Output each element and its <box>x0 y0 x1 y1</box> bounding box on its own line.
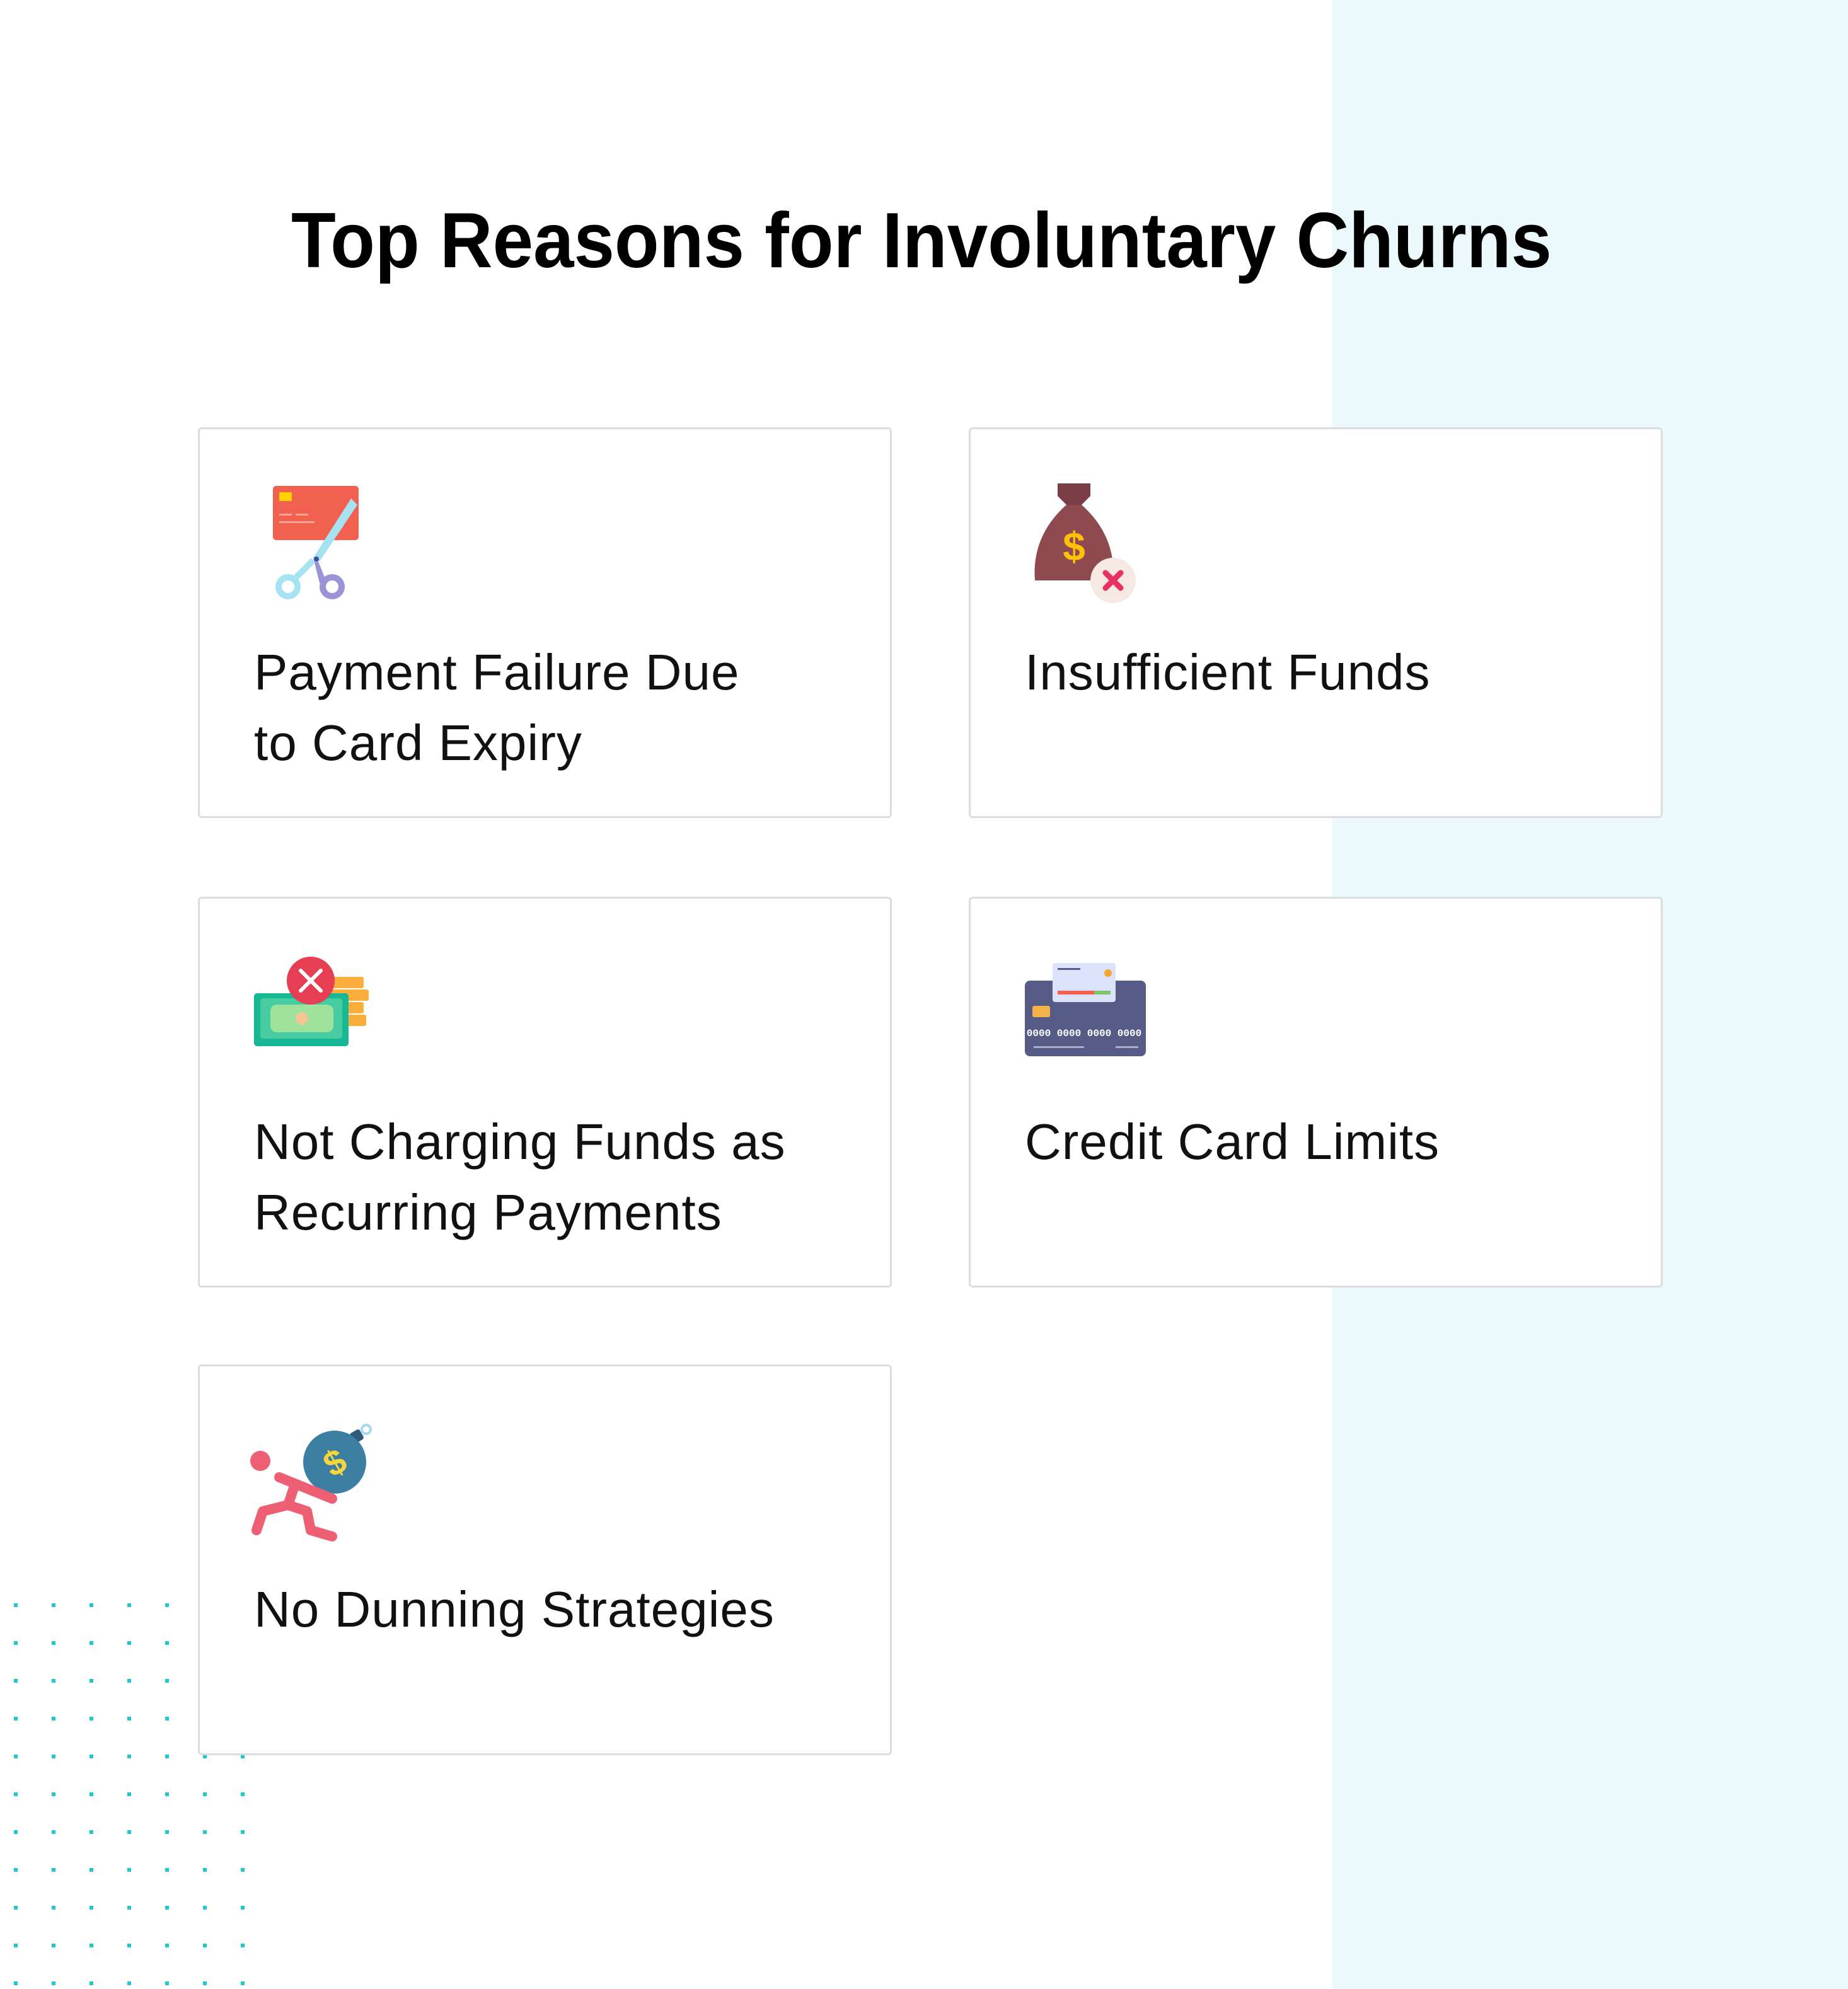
icon: person pushing bomb: $ <box>316 1440 353 1485</box>
text: Not Charging Funds as <box>254 1114 786 1170</box>
text: Payment Failure Due <box>254 644 739 700</box>
icon: person pushing bomb <box>250 1424 372 1542</box>
icon: credit card <box>1025 963 1146 1056</box>
background panel <box>1332 0 1848 1989</box>
dot pattern <box>14 1603 245 1985</box>
text <box>254 644 739 771</box>
panel: dunning <box>198 1364 892 1755</box>
text: Credit Card Limits <box>1025 1114 1440 1170</box>
icon: cash with x <box>254 957 369 1046</box>
icon: money bag with x <box>1035 483 1136 603</box>
text: No Dunning Strategies <box>254 1581 775 1637</box>
panel: card expiry <box>198 427 892 818</box>
title: Top Reasons for Involuntary Churns <box>291 197 1552 284</box>
text: Recurring Payments <box>254 1184 722 1240</box>
icon: card with scissors <box>273 486 359 599</box>
icon: credit card: 0000 0000 0000 0000 <box>1027 1028 1141 1039</box>
panel: credit card limits <box>969 897 1663 1288</box>
panel: not charging funds <box>198 897 892 1288</box>
text <box>254 1114 786 1240</box>
text: Insufficient Funds <box>1025 644 1431 700</box>
text: to Card Expiry <box>254 715 582 771</box>
icon: money bag with x: $ <box>1063 524 1085 569</box>
panel: insufficient funds <box>969 427 1663 818</box>
